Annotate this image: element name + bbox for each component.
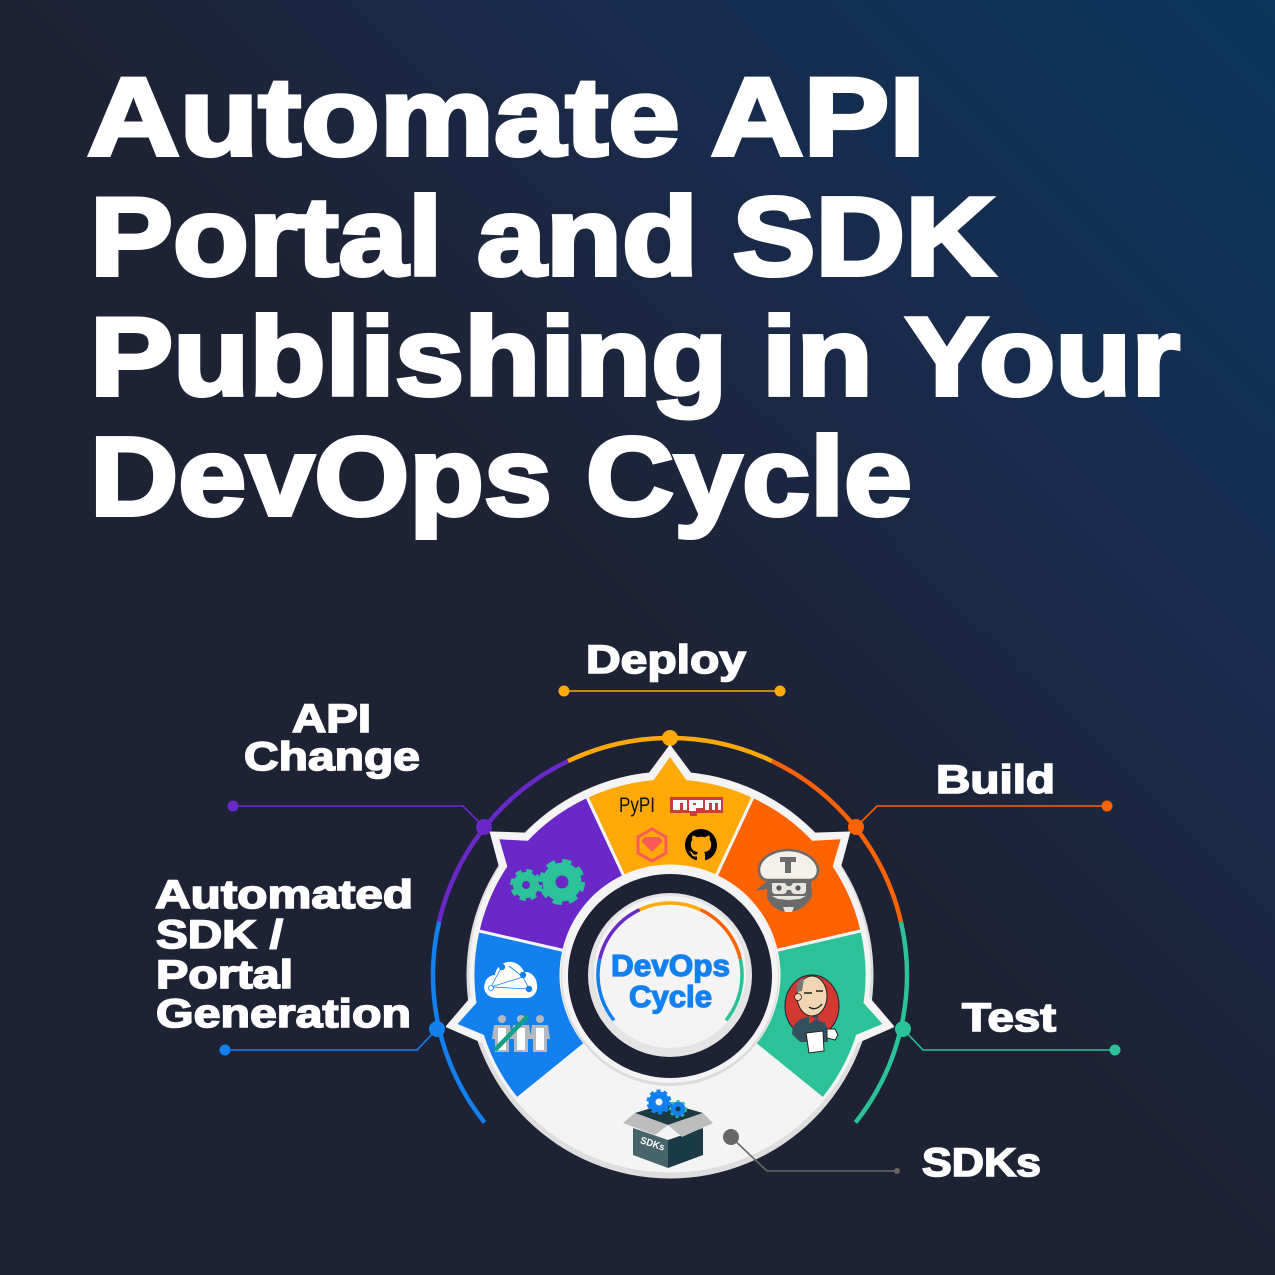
title: DevOps Cycle [90,415,912,539]
icon: blue gears [648,1091,686,1117]
label: API Change [228,697,484,827]
label: Automated SDK / Portal Generation: Automated [155,873,413,917]
icon: PyPI: PyPI [619,794,655,817]
title: Automate API [87,55,925,179]
wheel [442,746,898,1178]
label: Deploy: Deploy [586,638,747,682]
label: API Change: Change [244,735,420,779]
title: Portal and SDK [90,175,995,299]
label: Automated SDK / Portal Generation [155,873,437,1056]
label: SDKs: SDKs [922,1141,1041,1185]
icon: cloud network [484,962,537,998]
segment: Test [755,931,886,1099]
icon: people with slash [492,1015,550,1052]
label: Test [903,996,1120,1056]
segment: Portal Generation [454,931,585,1099]
segment: Build [716,796,862,950]
icon: gears [512,862,582,902]
icon: SDK box [623,1091,713,1168]
icon: SDK box: SDKs [639,1135,666,1154]
title [87,55,1180,539]
label: Automated SDK / Portal Generation: SDK / [156,913,283,957]
hub title: DevOps [611,948,730,983]
icon: GitHub [685,829,717,860]
label: Test: Test [962,996,1056,1040]
centre hub [588,893,752,1057]
icon: npm [670,797,723,816]
icon: Jenkins butler [785,975,839,1053]
label: API Change: API [292,697,371,741]
label: Deploy [558,638,786,696]
SDKs leader line [723,1129,900,1174]
icon: ruby gem [638,829,666,861]
hub title [611,948,730,1014]
outer ring arcs [429,730,911,1122]
label: Build: Build [936,758,1055,802]
title: Publishing in Your [90,295,1180,419]
label: Automated SDK / Portal Generation: Generation [156,992,411,1036]
label: Automated SDK / Portal Generation: Portal [156,953,293,997]
segment: API Change [478,796,624,950]
dark ring [561,867,779,1086]
label: Build [856,758,1112,827]
hub title: Cycle [629,979,712,1014]
icon: mustached mascot [755,850,818,912]
segment: Deploy [587,757,753,876]
